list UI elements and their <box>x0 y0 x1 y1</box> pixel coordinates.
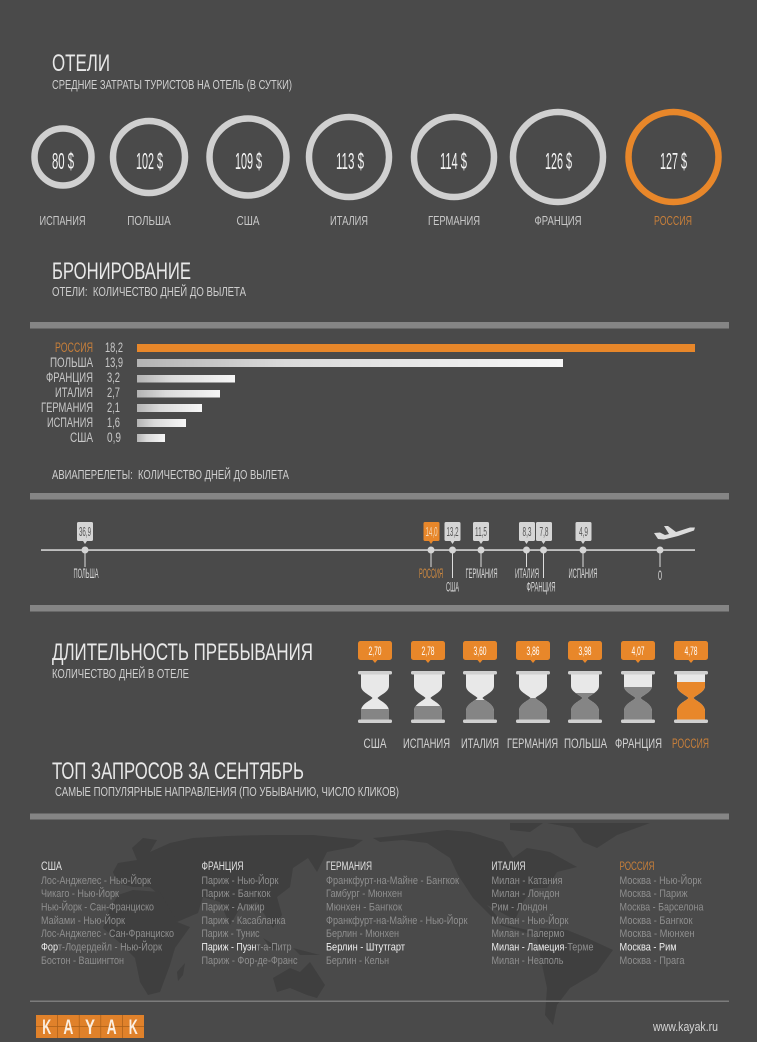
point: Russia: 14,0 <box>426 524 438 539</box>
logo: KAYAK: A <box>107 1016 117 1039</box>
circle: Germany <box>414 117 494 228</box>
bar: Italy: 2,7 <box>107 385 120 400</box>
bar: Russia: РОССИЯ <box>55 340 93 355</box>
hourglass: Germany <box>507 641 558 751</box>
bar: Poland: ПОЛЬША <box>50 355 93 370</box>
column: Italy routes: Милан - Катания <box>492 875 563 887</box>
logo: KAYAK: K <box>129 1016 138 1039</box>
point: USA <box>444 522 460 594</box>
hourglass: Germany: 3,86 <box>527 644 540 658</box>
bar: Germany: ГЕРМАНИЯ <box>41 400 93 415</box>
column: France routes <box>202 861 298 967</box>
column: Russia routes: Москва - Мюнхен <box>620 928 694 940</box>
point: France: 7,8 <box>540 524 548 539</box>
column: France routes: Париж - Пуэнт-а-Питр <box>202 942 292 954</box>
logo: KAYAK: A <box>63 1016 73 1039</box>
bar: Italy: ИТАЛИЯ <box>55 385 93 400</box>
heading: top searches: ТОП ЗАПРОСОВ ЗА СЕНТЯБРЬ <box>52 758 304 785</box>
hourglass: USA <box>358 641 392 751</box>
point: France <box>526 522 556 594</box>
panel: hotel cost circles <box>34 112 718 228</box>
subheading: top searches: САМЫЕ ПОПУЛЯРНЫЕ НАПРАВЛЕНИЯ (ПО УБЫВАНИЮ, ЧИСЛО КЛИКОВ) <box>55 784 399 799</box>
panel: hourglasses <box>358 641 709 751</box>
column: Germany routes: Мюнхен - Бангкок <box>326 902 402 914</box>
bar: Russia: 18,2 <box>105 340 123 355</box>
column: Germany routes: ГЕРМАНИЯ <box>326 861 372 873</box>
circle: Germany: 114 $ <box>440 148 467 174</box>
point: Germany <box>466 522 498 581</box>
circle: Italy: ИТАЛИЯ <box>330 213 368 228</box>
timeline: flights, days before departure <box>41 522 695 594</box>
bar: Italy <box>55 385 220 400</box>
bar: USA: США <box>70 430 93 445</box>
bar: France <box>46 370 235 385</box>
bar: Germany: 2,1 <box>107 400 120 415</box>
point: Russia <box>419 522 443 581</box>
logo: KAYAK: Y <box>85 1016 95 1039</box>
timeline: flights, days before departure: ИСПАНИЯ <box>568 566 598 581</box>
column: France routes: Париж - Нью-Йорк <box>202 874 279 887</box>
circle: France: ФРАНЦИЯ <box>534 213 582 228</box>
heading: length of stay: ДЛИТЕЛЬНОСТЬ ПРЕБЫВАНИЯ <box>52 639 313 666</box>
column: Italy routes <box>492 861 594 967</box>
bar: Spain: ИСПАНИЯ <box>47 415 93 430</box>
circle: Spain: 80 $ <box>52 148 74 174</box>
bar: USA: 0,9 <box>107 430 121 445</box>
column: USA routes: Майами - Нью-Йорк <box>41 914 125 927</box>
circle: Germany: ГЕРМАНИЯ <box>428 213 480 228</box>
column: Italy routes: Милан - Неаполь <box>492 955 564 967</box>
logo: KAYAK: K <box>42 1016 51 1039</box>
bar: Poland <box>50 355 563 370</box>
hourglass: Poland <box>564 641 607 751</box>
column: USA routes: Чикаго - Нью-Йорк <box>41 887 119 900</box>
hourglass: Russia: РОССИЯ <box>672 736 709 751</box>
point: zero: 0 <box>658 568 662 583</box>
circle: Italy: 113 $ <box>336 148 364 174</box>
bar: Russia <box>55 340 695 355</box>
hourglass: Spain <box>403 641 450 751</box>
circle: USA <box>210 118 286 228</box>
column: Germany routes: Берлин - Мюнхен <box>326 928 399 940</box>
hourglass: USA: США <box>364 736 386 751</box>
point: Poland <box>74 522 98 581</box>
timeline: flights, days before departure: ИТАЛИЯ <box>515 566 539 581</box>
column: Russia routes: Москва - Париж <box>620 888 688 900</box>
logo: KAYAK <box>36 1015 144 1039</box>
hourglass: Italy: ИТАЛИЯ <box>461 736 499 751</box>
column: USA routes: Лос-Анджелес - Сан-Франциско <box>41 928 174 940</box>
column: France routes: Париж - Касабланка <box>202 915 286 927</box>
world map background <box>103 823 650 1025</box>
hourglass: France: 4,07 <box>632 644 645 658</box>
column: USA routes: Нью-Йорк - Сан-Франциско <box>41 900 154 914</box>
hourglass: Russia <box>672 641 709 751</box>
website link: www.kayak.ru <box>652 1019 718 1034</box>
bar: Spain <box>47 415 186 430</box>
column: Germany routes: Франкфурт-на-Майне - Бангкок <box>326 875 459 887</box>
circle: Poland <box>113 121 185 228</box>
point: Germany: 11,5 <box>475 524 487 539</box>
column: USA routes: США <box>41 861 62 873</box>
column: USA routes <box>41 861 174 967</box>
column: Russia routes <box>620 861 704 967</box>
hourglass: Italy <box>461 641 499 751</box>
column: Italy routes: Милан - Нью-Йорк <box>492 914 569 927</box>
subheading: hotel booking: ОТЕЛИ: КОЛИЧЕСТВО ДНЕЙ ДО ВЫЛЕТА <box>52 284 246 299</box>
circle: France <box>513 112 603 228</box>
column: Italy routes: Рим - Лондон <box>492 902 548 914</box>
point: Italy: 8,3 <box>522 524 532 539</box>
hourglass: Poland: ПОЛЬША <box>564 736 607 751</box>
column: Italy routes: Милан - Ламеция-Терме <box>492 942 594 954</box>
subheading: length of stay: КОЛИЧЕСТВО ДНЕЙ В ОТЕЛЕ <box>52 666 189 681</box>
column: Germany routes: Берлин - Кельн <box>326 955 389 967</box>
timeline: flights, days before departure: РОССИЯ <box>419 566 443 581</box>
column: USA routes: Бостон - Вашингтон <box>41 955 124 967</box>
bar: France: ФРАНЦИЯ <box>46 370 93 385</box>
icon: airplane <box>654 526 695 540</box>
column: Russia routes: Москва - Барселона <box>620 902 704 914</box>
column: France routes: Париж - Фор-де-Франс <box>202 955 298 967</box>
circle: USA: 109 $ <box>235 148 262 174</box>
column: France routes: Париж - Бангкок <box>202 888 271 900</box>
column: Italy routes: Милан - Палермо <box>492 928 564 940</box>
circle: Poland: 102 $ <box>136 148 163 174</box>
column: Italy routes: ИТАЛИЯ <box>492 861 526 873</box>
circle: Russia: РОССИЯ <box>654 213 692 228</box>
hourglass: Spain: 2,78 <box>422 644 435 658</box>
hourglass: Poland: 3,98 <box>579 644 592 658</box>
hourglass: Russia: 4,78 <box>685 644 698 658</box>
circle: Spain <box>34 128 92 228</box>
hourglass: France <box>615 641 662 751</box>
point: Spain: 4,9 <box>579 524 588 539</box>
bar: Germany <box>41 400 202 415</box>
circle: Spain: ИСПАНИЯ <box>40 213 86 228</box>
column: Russia routes: Москва - Бангкок <box>620 915 693 927</box>
bar: Poland: 13,9 <box>105 355 123 370</box>
hourglass: Italy: 3,60 <box>474 644 487 658</box>
hourglass: USA: 2,70 <box>369 644 382 658</box>
hourglass: France: ФРАНЦИЯ <box>615 736 662 751</box>
column: USA routes: Форт-Лодердейл - Нью-Йорк <box>41 940 162 954</box>
circle: Poland: ПОЛЬША <box>127 213 171 228</box>
circle: France: 126 $ <box>545 148 572 174</box>
subheading: flights: АВИАПЕРЕЛЕТЫ: КОЛИЧЕСТВО ДНЕЙ ДО ВЫЛЕТА <box>52 467 289 482</box>
column: USA routes: Лос-Анджелес - Нью-Йорк <box>41 874 151 887</box>
column: Russia routes: Москва - Рим <box>620 942 676 954</box>
column: Germany routes: Берлин - Штутгарт <box>326 942 405 954</box>
column: Germany routes: Франкфурт-на-Майне - Нью-Йорк <box>326 914 468 927</box>
subheading: hotels: СРЕДНИЕ ЗАТРАТЫ ТУРИСТОВ НА ОТЕЛЬ (В СУТКИ) <box>52 77 292 92</box>
point: USA: 13,2 <box>446 524 458 539</box>
hourglass: Germany: ГЕРМАНИЯ <box>507 736 558 751</box>
timeline: flights, days before departure: США <box>446 580 459 594</box>
timeline: flights, days before departure: ГЕРМАНИЯ <box>466 566 498 581</box>
heading: booking: БРОНИРОВАНИЕ <box>52 258 191 285</box>
column: France routes: Париж - Тунис <box>202 928 260 940</box>
timeline: flights, days before departure: ФРАНЦИЯ <box>526 580 556 594</box>
heading: hotels: ОТЕЛИ <box>52 50 110 77</box>
point: zero <box>656 546 664 583</box>
column: France routes: Париж - Алжир <box>202 902 264 914</box>
bar: USA <box>70 430 165 445</box>
point: Poland: 36,9 <box>79 524 91 539</box>
column: Germany routes <box>326 861 468 967</box>
hourglass: Spain: ИСПАНИЯ <box>403 736 450 751</box>
bar: Spain: 1,6 <box>107 415 120 430</box>
bar chart: days before departure, hotels <box>41 340 695 445</box>
point: Spain <box>568 522 598 581</box>
circle: USA: США <box>236 213 260 228</box>
column: Italy routes: Милан - Лондон <box>492 888 560 900</box>
column: Germany routes: Гамбург - Мюнхен <box>326 888 402 900</box>
bar: France: 3,2 <box>107 370 120 385</box>
circle: Italy <box>309 117 389 228</box>
circle: Russia <box>628 112 718 228</box>
column: Russia routes: Москва - Нью-Йорк <box>620 874 702 887</box>
column: France routes: ФРАНЦИЯ <box>202 861 244 873</box>
point: Italy <box>515 522 539 581</box>
column: Russia routes: РОССИЯ <box>620 861 654 873</box>
column: Russia routes: Москва - Прага <box>620 955 685 967</box>
timeline: flights, days before departure: ПОЛЬША <box>74 566 98 581</box>
circle: Russia: 127 $ <box>660 148 687 174</box>
